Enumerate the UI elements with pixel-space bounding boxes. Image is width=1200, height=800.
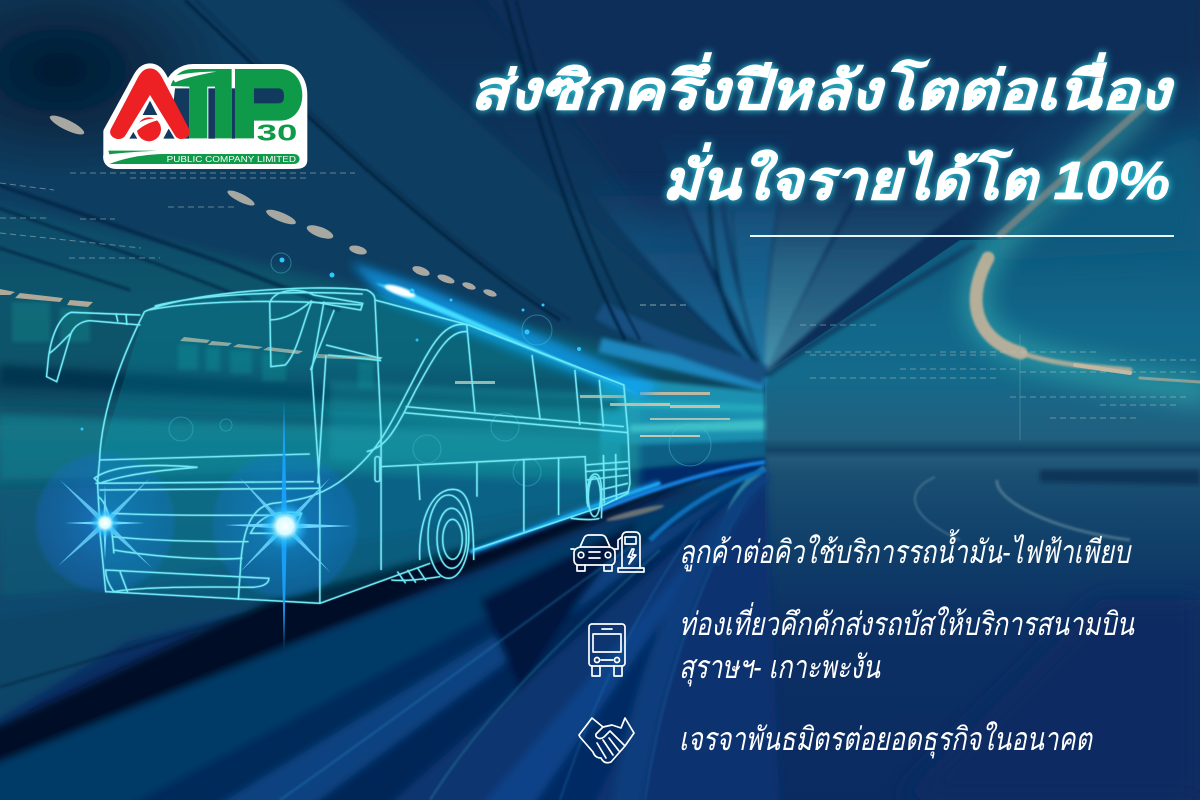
item 1: customers queue for fuel and EV buses	[571, 529, 1132, 572]
side swoosh	[238, 324, 469, 600]
icon: car and EV charger	[571, 532, 644, 572]
logo: ATP 30 Public Company Limited	[108, 68, 302, 164]
right headlight flare	[225, 400, 352, 650]
wireframe bus illustration	[47, 288, 630, 603]
light flares behind bus	[33, 253, 711, 600]
title: มั่นใจรายได้โต 10%	[662, 142, 1170, 211]
right tunnel wall	[765, 130, 1200, 800]
ceiling ribs	[0, 0, 640, 340]
door handle	[375, 457, 380, 482]
icon: bus front	[589, 624, 625, 676]
thin ray highlights	[0, 480, 745, 800]
letter P	[235, 69, 302, 138]
lower speed rays	[0, 470, 780, 800]
curved fan at tunnel mouth	[590, 110, 1030, 385]
horizontal light streaks on the left wall	[0, 365, 640, 600]
item 3 text: เจรจาพันธมิตรต่อยอดธุรกิจในอนาคต	[679, 721, 1094, 759]
bus body outline	[47, 288, 630, 603]
navy gaps	[129, 88, 235, 139]
right mirror	[270, 290, 363, 367]
bus body tint	[98, 288, 630, 603]
distant dashed lights	[0, 173, 1200, 418]
letter A	[110, 68, 190, 139]
windshield wiper	[94, 465, 197, 483]
anniversary 30: 30	[257, 119, 297, 145]
ceiling lamps	[0, 112, 730, 523]
item 2: tourism bus service	[589, 602, 1135, 687]
tunnel floor curves	[600, 462, 1130, 565]
front wheel	[420, 489, 474, 560]
bright speed streak on the roof	[350, 262, 660, 400]
logo: ATP 30 Public Company Limited: PUBLIC COMPANY LIMITED	[167, 155, 296, 164]
title: ส่งซิกครึ่งปีหลังโตต่อเนื่อง	[470, 52, 1175, 121]
left mirror	[47, 312, 140, 382]
item 2: tourism bus service: สุราษฯ- เกาะพะงัน	[679, 649, 881, 687]
rear vent	[585, 462, 628, 500]
company ribbon	[109, 154, 300, 164]
item 3: partnership talks	[579, 718, 1094, 763]
left headlight flare	[58, 478, 152, 568]
title	[470, 52, 1175, 211]
title divider	[750, 235, 1174, 237]
grille lines	[112, 513, 302, 515]
logo white backing	[108, 68, 302, 164]
icon: handshake	[579, 718, 634, 763]
rear wheel	[587, 474, 602, 518]
letters T and I	[171, 69, 232, 138]
curved tunnel light	[975, 107, 1200, 440]
streak block left of the tunnel edge	[600, 375, 765, 490]
